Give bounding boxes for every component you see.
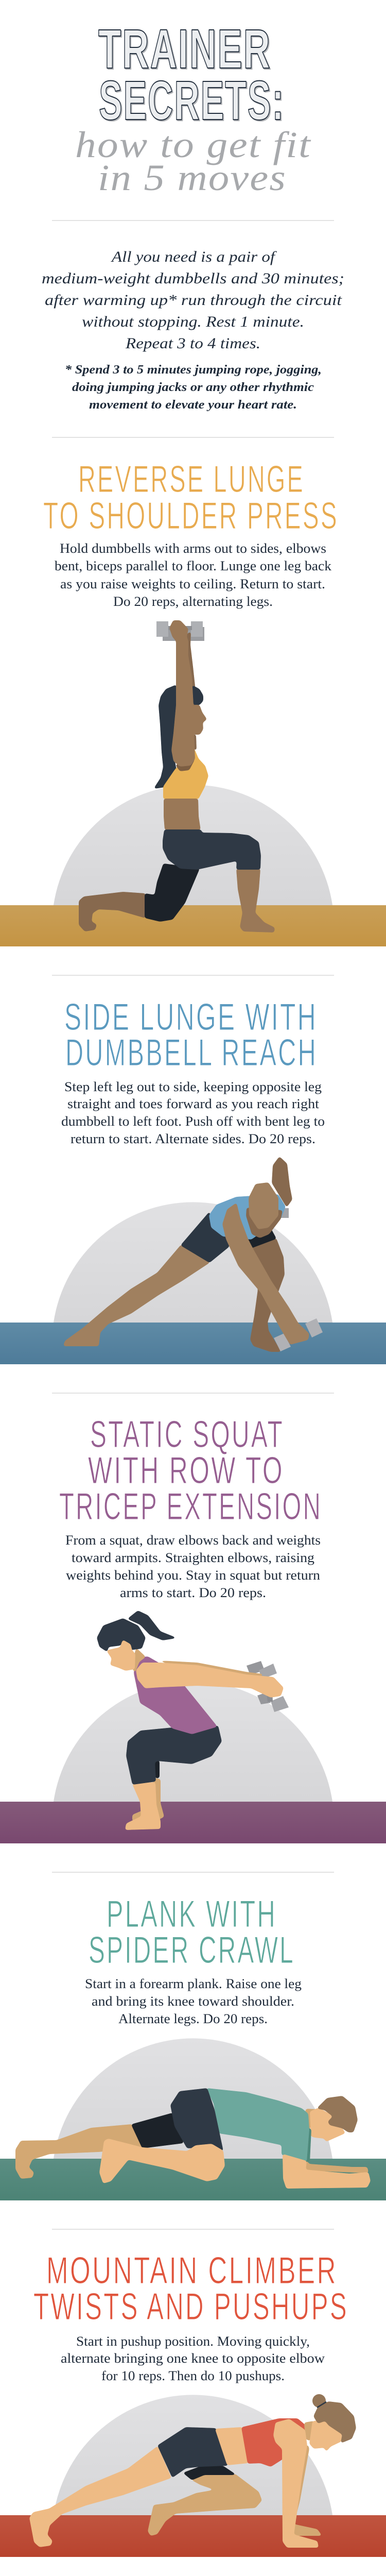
panel: mountain climber twists and pushups xyxy=(0,2250,386,2557)
front leg xyxy=(237,869,274,932)
instructions: Start in a forearm plank. Raise one leg xyxy=(85,1976,302,1991)
floor mat xyxy=(0,2159,386,2200)
sports top xyxy=(242,2419,305,2466)
instructions: toward armpits. Straighten elbows, raising xyxy=(72,1550,314,1565)
backdrop semicircle xyxy=(54,1681,332,1802)
figure: woman lunging with dumbbells overhead xyxy=(79,621,274,932)
shorts xyxy=(171,2089,223,2151)
title line: secrets xyxy=(99,69,286,132)
figure: side lunge reaching to foot xyxy=(64,1157,323,1351)
front leg xyxy=(100,2139,224,2183)
instructions xyxy=(85,1976,302,2026)
dumbbells at foot xyxy=(274,1318,323,1351)
backdrop semicircle xyxy=(54,2038,332,2159)
title xyxy=(75,18,311,198)
waist xyxy=(164,799,201,830)
backdrop semicircle xyxy=(54,1202,332,1323)
floor mat xyxy=(0,1323,386,1364)
title line: trainer: TRAINER xyxy=(99,19,272,81)
heading xyxy=(89,1893,295,1971)
intro text: medium-weight dumbbells and 30 minutes; xyxy=(42,270,344,287)
intro text: after warming up* run through the circuit xyxy=(45,292,342,309)
shin and foot xyxy=(126,1783,160,1829)
instructions xyxy=(55,541,331,609)
warm-up footnote: movement to elevate your heart rate. xyxy=(89,398,297,412)
instructions xyxy=(65,1533,321,1600)
intro text xyxy=(42,248,344,352)
arm xyxy=(160,1661,262,1681)
face and neck xyxy=(194,734,196,750)
instructions xyxy=(61,1079,325,1146)
instructions: and bring its knee toward shoulder. xyxy=(92,1994,294,2009)
subtitle: how to get fit xyxy=(75,124,311,165)
bent leg xyxy=(148,2475,261,2535)
title line: trainer: TRAINER xyxy=(98,18,271,80)
bent leg xyxy=(251,1239,284,1351)
backdrop semicircle xyxy=(54,2395,332,2515)
hair xyxy=(318,2096,357,2132)
instructions: arms to start. Do 20 reps. xyxy=(120,1585,266,1600)
head xyxy=(247,1208,282,1238)
tank top xyxy=(134,1657,217,1734)
dumbbells xyxy=(156,621,204,641)
intro text: All you need is a pair of xyxy=(111,248,277,265)
shorts xyxy=(181,1212,229,1262)
figure: man in forearm plank with knee drawn in xyxy=(16,2089,370,2188)
back arm xyxy=(288,2446,321,2535)
instructions: dumbbell to left foot. Push off with bent leg to xyxy=(61,1114,325,1129)
back leg and foot xyxy=(133,1778,164,1821)
hair xyxy=(312,2394,356,2443)
heading: STATIC SQUAT xyxy=(90,1414,284,1455)
head xyxy=(310,2420,341,2451)
heading: PLANK WITH xyxy=(107,1893,277,1935)
ponytail xyxy=(272,1157,292,1207)
title line: secrets: SECRETS: xyxy=(99,69,285,131)
floor mat xyxy=(0,1802,386,1843)
reaching arm xyxy=(223,1204,309,1344)
back arm xyxy=(186,632,195,721)
instructions: From a squat, draw elbows back and weights xyxy=(65,1533,321,1548)
front arm xyxy=(274,2419,318,2547)
floor mat xyxy=(0,2515,386,2557)
back forearm xyxy=(305,2159,368,2173)
title line: trainer xyxy=(98,18,272,81)
figure: woman squatting with arms extended back xyxy=(97,1611,289,1829)
intro text: Repeat 3 to 4 times. xyxy=(125,335,260,352)
panel: static squat with row to tricep extension xyxy=(0,1414,386,1843)
instructions: as you raise weights to ceiling. Return to start. xyxy=(60,577,325,591)
heading: WITH ROW TO xyxy=(88,1450,284,1492)
instructions: Do 20 reps, alternating legs. xyxy=(113,594,273,609)
subtitle xyxy=(75,124,311,198)
forearm xyxy=(283,2155,370,2188)
heading xyxy=(64,996,318,1074)
face xyxy=(107,1640,135,1670)
top xyxy=(209,1195,285,1239)
heading xyxy=(59,1414,322,1528)
instructions: Step left leg out to side, keeping opposite leg xyxy=(64,1079,322,1094)
instructions: return to start. Alternate sides. Do 20 reps. xyxy=(71,1131,315,1146)
panel: reverse lunge to shoulder press xyxy=(0,459,386,946)
panel: side lunge with dumbbell reach xyxy=(0,996,386,1364)
shorts xyxy=(184,2466,235,2480)
floor mat xyxy=(0,905,386,946)
instructions: Start in pushup position. Moving quickly, xyxy=(76,2334,310,2349)
back leg xyxy=(79,892,145,931)
figure: woman in mountain climber position xyxy=(30,2394,356,2547)
neck xyxy=(305,2421,314,2441)
warm-up footnote xyxy=(65,363,322,412)
instructions xyxy=(61,2334,325,2383)
subtitle: in 5 moves xyxy=(98,157,287,198)
hair xyxy=(154,685,177,788)
instructions: for 10 reps. Then do 10 pushups. xyxy=(101,2368,285,2383)
instructions: weights behind you. Stay in squat but return xyxy=(66,1568,320,1583)
instructions: bent, biceps parallel to floor. Lunge one leg back xyxy=(55,558,331,573)
heading xyxy=(33,2250,348,2328)
instructions: Hold dumbbells with arms out to sides, elbows xyxy=(60,541,326,556)
head xyxy=(304,2109,318,2130)
panel: plank with spider crawl xyxy=(0,1893,386,2200)
heading xyxy=(43,459,339,537)
instructions: straight and toes forward as you reach right xyxy=(67,1096,320,1111)
warm-up footnote: * Spend 3 to 5 minutes jumping rope, jogging, xyxy=(65,363,322,377)
hidden dumbbell xyxy=(280,1208,289,1218)
backdrop semicircle xyxy=(54,785,332,905)
instructions: Alternate legs. Do 20 reps. xyxy=(118,2011,268,2026)
hair xyxy=(128,1611,176,1640)
front arm xyxy=(170,621,195,766)
intro text: without stopping. Rest 1 minute. xyxy=(82,313,304,330)
warm-up footnote: doing jumping jacks or any other rhythmic xyxy=(72,381,314,394)
sports top xyxy=(164,748,208,799)
back leg xyxy=(30,2447,171,2547)
instructions: alternate bringing one knee to opposite elbow xyxy=(61,2351,325,2366)
shirt xyxy=(305,2128,311,2161)
straight leg xyxy=(64,1245,209,1346)
dumbbells xyxy=(247,1661,289,1712)
back leg xyxy=(16,2125,143,2178)
leggings xyxy=(154,1760,160,1778)
title line: secrets: SECRETS: xyxy=(100,70,286,132)
neck xyxy=(132,1649,145,1672)
waist xyxy=(216,2428,248,2465)
